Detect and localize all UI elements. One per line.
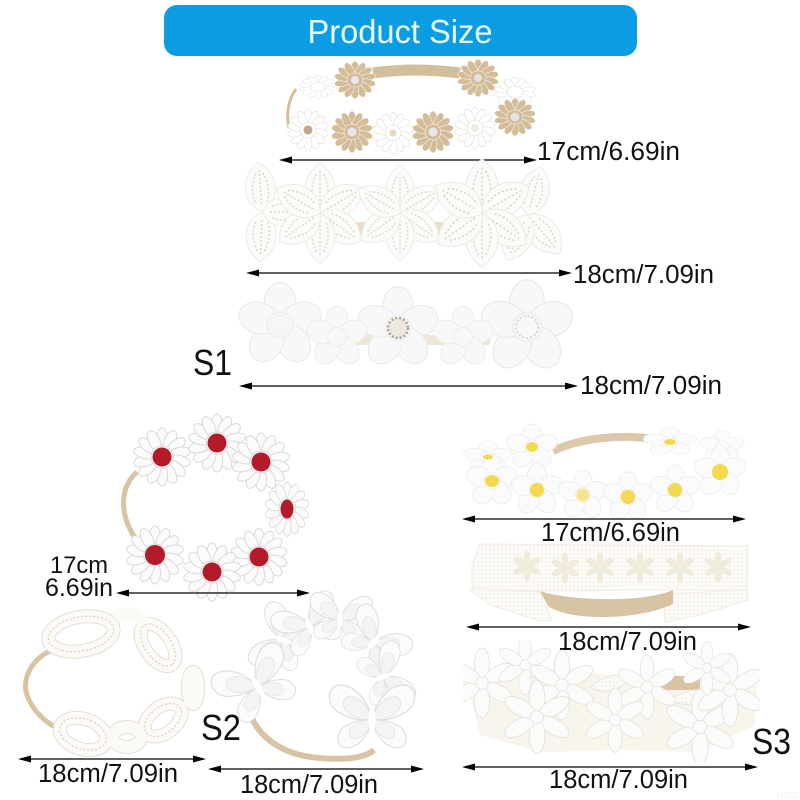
label: S1: S1 — [193, 342, 232, 383]
arrow: 17cm — [279, 156, 537, 164]
measure label: 18cm/7.09in — [580, 372, 722, 400]
measure label: 18cm/7.09in — [240, 771, 378, 799]
label: S2: S2 — [201, 707, 241, 748]
headband: tan daisies — [287, 59, 536, 154]
headband: oval lace — [26, 612, 198, 756]
panel: S3 headbands — [448, 424, 791, 794]
measure label: 17cm/6.69in — [541, 519, 680, 547]
measure label: 18cm/7.09in — [38, 760, 178, 788]
headband: white blossoms — [235, 280, 577, 375]
arrow: 18cm — [239, 382, 578, 390]
arrow: 17cm — [116, 590, 310, 596]
headband: red daisies — [123, 414, 309, 601]
headband: floral lace — [463, 640, 760, 762]
label: S3: S3 — [752, 721, 791, 762]
measure label: 18cm/7.09in — [573, 261, 714, 289]
headband: crochet lace band — [470, 544, 748, 622]
arrow: 18cm — [466, 624, 751, 630]
watermark: H3CD — [777, 791, 799, 800]
headband: yellow daisies — [461, 424, 748, 523]
measure label: 6.69in — [45, 574, 113, 602]
panel: S1 headbands — [193, 59, 722, 400]
arrow: 18cm — [208, 766, 424, 772]
arrow: 18cm — [18, 756, 206, 762]
measure label: 17cm — [50, 552, 108, 579]
measure label: 18cm/7.09in — [549, 766, 688, 794]
measure label: 18cm/7.09in — [558, 628, 697, 656]
measure label: 17cm/6.69in — [537, 138, 680, 166]
title banner — [164, 5, 637, 56]
arrow: 18cm — [246, 270, 572, 276]
headband: white leaf flowers — [244, 159, 572, 267]
arrow: 18cm — [462, 764, 758, 770]
headband: butterflies — [207, 588, 418, 759]
panel: S2 headbands — [18, 414, 424, 799]
arrow: 17cm — [462, 516, 746, 522]
title text: Product Size — [308, 13, 492, 50]
